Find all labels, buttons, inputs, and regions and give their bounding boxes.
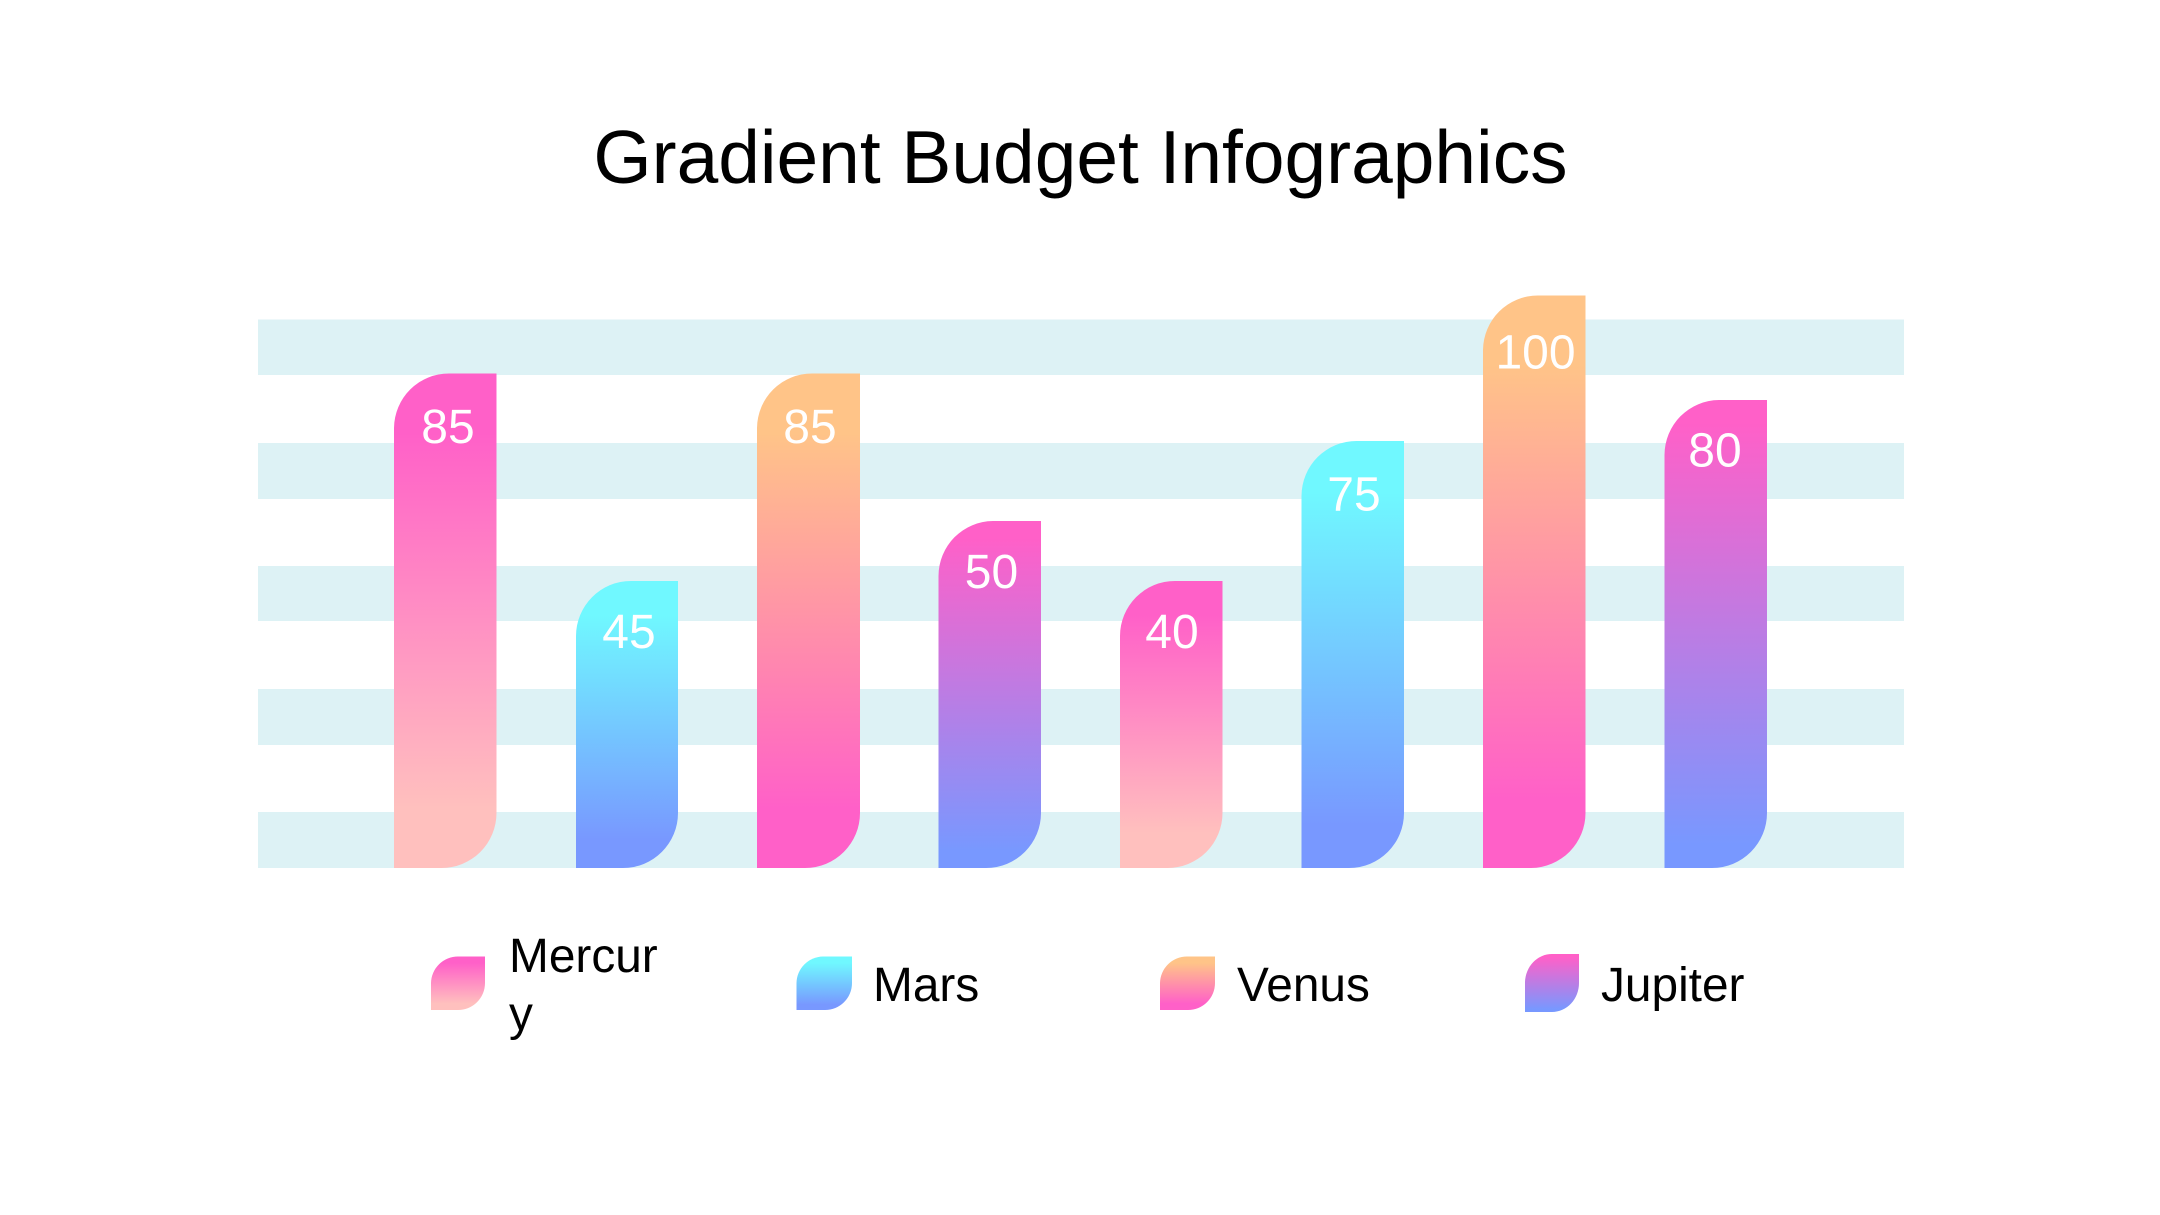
bar chart [394,296,1767,868]
bar: Mars 75: 75 [1327,468,1381,522]
legend [431,930,1745,1041]
legend item: Jupiter [1525,954,1745,1012]
bar: Venus 100 [1483,296,1586,868]
legend item: Venus [1160,956,1370,1012]
bar: Mercury 85: 85 [421,401,475,454]
bar: Jupiter 50 [938,521,1041,868]
bar: Jupiter 50: 50 [965,546,1018,599]
bar: Venus 85 [757,374,860,868]
title: Gradient Budget Infographics [593,115,1568,199]
bar: Mercury 40: 40 [1145,606,1199,659]
legend item: Jupiter: Jupiter [1601,959,1745,1012]
bar: Venus 85: 85 [783,401,837,454]
legend item: Mercury [431,930,658,1041]
background stripes [258,320,1904,868]
legend item: Venus: Venus [1237,959,1370,1012]
bar: Jupiter 80 [1664,400,1767,868]
bar: Mercury 85 [394,374,496,868]
bar: Venus 100: 100 [1495,326,1576,380]
legend item: Mercury: y [509,988,533,1041]
legend item: Mars: Mars [873,959,979,1012]
bar: Mars 45: 45 [602,606,656,659]
bar: Mars 45 [576,581,678,868]
bar: Jupiter 80: 80 [1688,424,1742,478]
bar: Mars 75 [1302,441,1404,868]
legend item: Mars [796,956,979,1012]
legend item: Mercury: Mercur [509,930,658,983]
bar: Mercury 40 [1120,581,1222,868]
